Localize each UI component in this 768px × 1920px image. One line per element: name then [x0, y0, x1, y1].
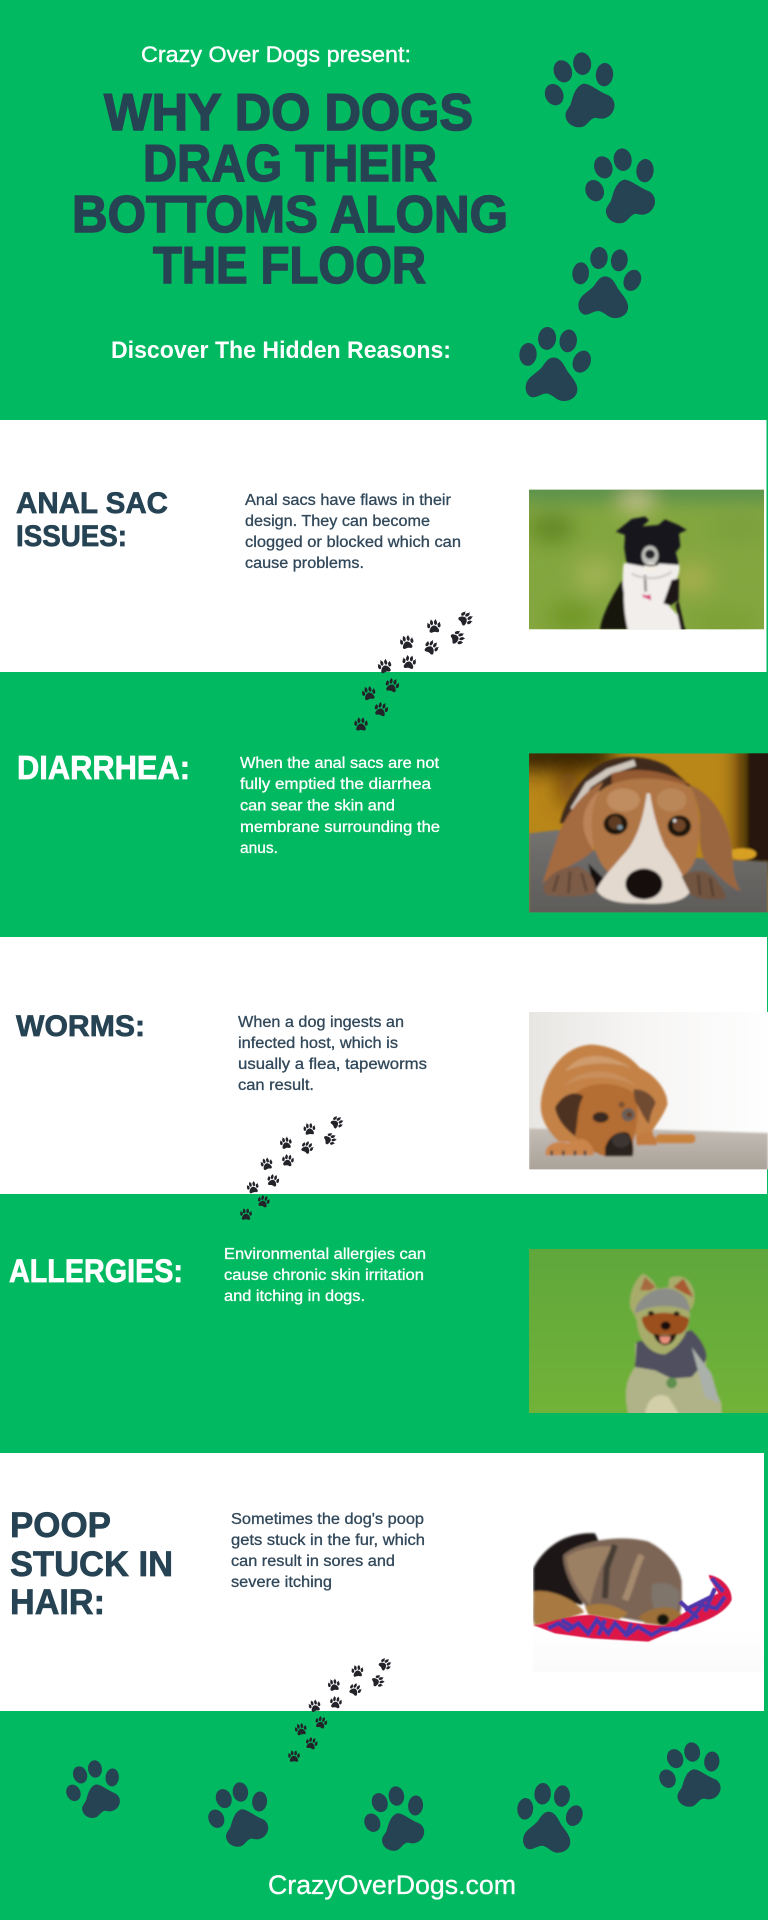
text: diarrhea description: membrane surrounding the: [240, 819, 440, 836]
photo: yorkshire terrier on grass: [529, 1249, 768, 1415]
heading: poop stuck in hair: STUCK IN: [10, 1545, 173, 1584]
footer website: CrazyOverDogs.com: [268, 1870, 516, 1900]
text: poop stuck description: [231, 1511, 425, 1591]
text: allergies description: and itching in dogs.: [224, 1288, 365, 1305]
icons: footer paw prints: [64, 1741, 721, 1853]
icon: paw track 3: [288, 1656, 393, 1762]
text: diarrhea description: [240, 755, 440, 857]
title: [72, 84, 508, 295]
heading: anal sac issues: ANAL SAC: [16, 487, 168, 520]
panel: diarrhea background: [0, 672, 768, 937]
text: worms description: [238, 1014, 427, 1094]
title: WHY DO DOGS: [104, 84, 473, 142]
panel: anal sac issues background: [0, 420, 766, 672]
intro line: Crazy Over Dogs present:: [141, 42, 411, 67]
text: anal sac description: clogged or blocked which can: [245, 534, 461, 551]
heading: poop stuck in hair: HAIR:: [10, 1583, 105, 1622]
heading: worms: WORMS:: [16, 1010, 145, 1043]
title: THE FLOOR: [153, 237, 426, 295]
photo: beagle lying down: [529, 753, 768, 912]
text: anal sac description: design. They can become: [245, 513, 430, 530]
text: diarrhea description: can sear the skin and: [240, 798, 395, 814]
panel: header background: [0, 0, 768, 420]
text: poop stuck description: gets stuck in the fur, which: [231, 1532, 425, 1549]
text: anal sac description: cause problems.: [245, 555, 364, 572]
icon: paw track 1: [354, 609, 475, 731]
text: worms description: can result.: [238, 1077, 314, 1094]
heading: anal sac issues: ISSUES:: [16, 520, 127, 553]
title: BOTTOMS ALONG: [72, 186, 508, 244]
photo: brown dog lying sad: [529, 1012, 768, 1171]
heading: poop stuck in hair: [10, 1506, 173, 1622]
heading: allergies: ALLERGIES:: [9, 1253, 183, 1289]
panel: poop stuck in hair background: [0, 1453, 764, 1711]
title: DRAG THEIR: [143, 135, 437, 193]
text: allergies description: cause chronic skin irritation: [224, 1267, 424, 1284]
heading: anal sac issues: [16, 487, 168, 553]
text: diarrhea description: anus.: [240, 840, 278, 857]
text: diarrhea description: fully emptied the diarrhea: [240, 776, 431, 793]
panel: worms background: [0, 937, 767, 1194]
text: poop stuck description: severe itching: [231, 1574, 332, 1591]
text: allergies description: Environmental allergies can: [224, 1246, 426, 1263]
heading: poop stuck in hair: POOP: [10, 1506, 111, 1545]
panel: footer background: [0, 1711, 768, 1920]
text: worms description: infected host, which is: [238, 1035, 398, 1052]
photo: terrier resting on red blanket: [533, 1532, 732, 1642]
text: poop stuck description: can result in sores and: [231, 1553, 395, 1570]
text: anal sac description: Anal sacs have flaws in their: [245, 492, 451, 509]
heading: diarrhea: DIARRHEA:: [17, 749, 190, 786]
icons: header paw prints: [518, 51, 655, 401]
text: worms description: When a dog ingests an: [238, 1014, 404, 1031]
photo: border collie on grass: [529, 490, 764, 630]
text: allergies description: [224, 1246, 426, 1305]
text: worms description: usually a flea, tapeworms: [238, 1056, 427, 1073]
text: diarrhea description: When the anal sacs are not: [240, 755, 440, 772]
icon: paw track 2: [240, 1114, 345, 1220]
text: poop stuck description: Sometimes the dog's poop: [231, 1511, 424, 1528]
panel: allergies background: [0, 1194, 768, 1453]
text: anal sac description: [245, 492, 461, 572]
subtitle: Discover The Hidden Reasons:: [111, 337, 451, 364]
